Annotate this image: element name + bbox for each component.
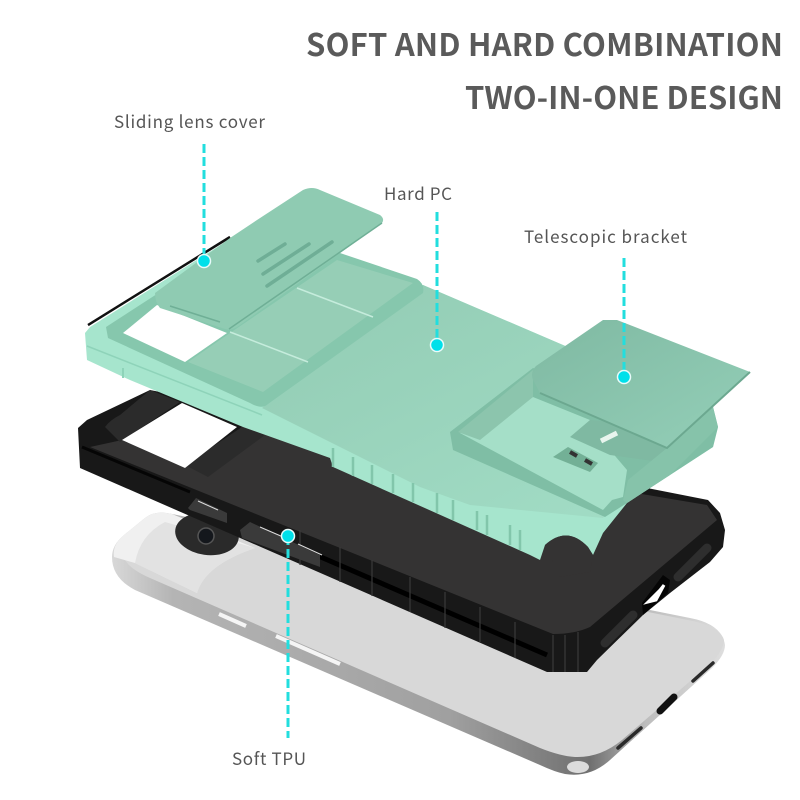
illustration: telescopic bracket [450,320,750,517]
heading: SOFT AND HARD COMBINATION [306,20,783,65]
annotation: telescopic bracket [524,223,688,384]
annotation: hard PC [384,180,452,352]
heading [306,20,783,118]
illustration: green hard PC shell [85,237,718,577]
illustration: silver phone [112,509,725,775]
annotation: soft TPU: Soft TPU [232,745,306,770]
annotation: soft TPU [232,530,306,770]
heading: TWO-IN-ONE DESIGN [465,73,783,118]
illustration: black TPU case [78,390,725,672]
illustration: lens frame [106,253,423,407]
annotation: sliding lens cover: Sliding lens cover [114,108,265,133]
annotation: sliding lens cover [114,108,265,268]
annotation: telescopic bracket: Telescopic bracket [524,223,688,248]
illustration: sliding lens cover [155,188,383,330]
annotation: hard PC: Hard PC [384,180,452,205]
